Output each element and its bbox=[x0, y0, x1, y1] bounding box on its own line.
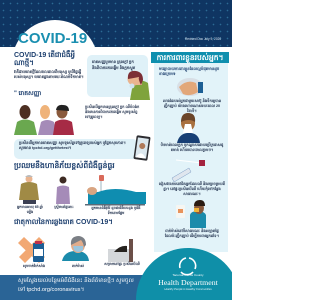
illustration: elderly man bbox=[19, 175, 39, 204]
heading: what is COVID-19: COVID-19 តើជាជំងឺអ្វី bbox=[14, 52, 75, 59]
callout: symptoms bbox=[87, 55, 148, 97]
label: chronic illness: អ្នកមានជំងឺរ៉ាំរ៉ៃ ដូចជាជំងឺបេះដូង ឬជំងឺទឹកនោមផ្អែម bbox=[91, 206, 141, 215]
intro text: វាគឺជាមេរោគថ្មីដែលរាលដាលពីមនុស្ស ឬបើផ្ទៃធ្វើរបស់មនុស្ស។ មេរោគឆ្លងតាមរយៈតំណក់ទឹកមាត់។ bbox=[14, 70, 84, 79]
paragraph: symptom details: ប្រសិនបើអ្នកមានគ្រុនក្តៅ ក្អក ឈឺបំពង់ក និងមានការពិបាកដកដង្ហើម សូមទូរស័ព្ទទៅគ្រូពេទ្យ។ bbox=[85, 105, 139, 119]
prevention step: masks: ពាក់ម៉ាស់នៅទីសាធារណៈ និងសម្អាតផ្ទៃដែលប៉ះញឹកញាប់ ដើម្បីការពារអ្នកដទៃ។ bbox=[165, 229, 219, 238]
illustration: coughing woman bbox=[128, 71, 150, 100]
illustration: staying home with mask bbox=[176, 200, 206, 228]
logo circle bbox=[136, 248, 232, 300]
illustration: woman in purple bbox=[56, 176, 70, 204]
footer band bbox=[0, 275, 232, 300]
illustration: patient in bed bbox=[108, 239, 133, 262]
illustration: masked man bbox=[62, 236, 89, 261]
logo text: Health Department: Health Department bbox=[158, 278, 218, 287]
logo mark bbox=[180, 258, 196, 275]
footer text: សូមស្វែងយល់បន្ថែមអំពីជំងឺនេះ និងព័ត៌មានថ្មីៗ សូមចូលទៅ tpchd.org/coronavirus។ bbox=[18, 278, 134, 293]
logo text: agency name: Tacoma–Pierce County bbox=[172, 273, 204, 277]
label: elderly: អ្នកមានអាយុ 65 ឆ្នាំឡើង bbox=[17, 205, 43, 214]
illustration: tablet doctor bbox=[133, 135, 151, 161]
title: COVID-19 bbox=[18, 30, 87, 47]
heading: what is COVID-19: ណាថ្មី។ bbox=[14, 60, 34, 67]
heading: high risk people: ប្រឈមនឹងហានិភ័យខ្ពស់ពីជំងឺធ្ងន់ធ្ងរ bbox=[14, 161, 115, 170]
callout text: ប្រសិនបើអ្នកមានរោគសញ្ញា សូមទូរស័ព្ទទៅគ្រូពេទ្យរបស់អ្នក ឬផ្នែកសុខភាព។ សូមអាន tpchd.org/getthetest។ bbox=[19, 141, 126, 150]
prevention step: cover cough: បិទមាត់ពេលក្អក ឬកណ្តាស់ដោយប្រើក្រដាសជូតមាត់ ហើយបោះចោលភ្លាមៗ។ bbox=[161, 143, 223, 152]
illustration: person sneezing bbox=[177, 113, 200, 143]
revision date: Revised Doc July 9, 2020 bbox=[185, 37, 221, 41]
label: rest: សម្រាកនៅផ្ទះ ប្រសិនបើឈឺ bbox=[104, 262, 140, 266]
illustration: test swab bbox=[172, 160, 205, 182]
heading: prevention: ការការពារខ្លួនរបស់អ្នក។ bbox=[157, 53, 223, 62]
header banner bbox=[0, 0, 232, 47]
label: pregnant: ស្ត្រីមានផ្ទៃពោះ bbox=[54, 205, 74, 209]
illustration: bandage and vaccine bbox=[18, 237, 45, 263]
illustration: three people with symptoms bbox=[14, 105, 74, 135]
heading: if you have COVID-19: ជាតុកាលនៃការឆ្លងរោគ COVID-19។ bbox=[14, 219, 113, 226]
label: vaccine: សូមចាក់វ៉ាក់សាំង bbox=[23, 264, 45, 268]
illustration: hospital bed bbox=[85, 175, 146, 206]
logo text: tagline: Healthy People in Healthy Communities bbox=[164, 288, 212, 291]
prevention panel bbox=[154, 62, 228, 252]
prevention step: wash hands: លាងដៃរបស់អ្នកជាមួយសាប៊ូ និងទឹកឲ្យបានញឹកញាប់ យ៉ាងហោចណាស់រយៈពេល 20 វិនាទី។ bbox=[163, 99, 221, 113]
label: mask: ពាក់ម៉ាស់ bbox=[72, 264, 84, 268]
title circle bbox=[15, 20, 95, 47]
callout text: រោគសញ្ញារួមមាន គ្រុនក្តៅ ក្អក និងពិបាកដកដង្ហើម និងក្អកស្ងួត bbox=[92, 60, 135, 70]
heading: what is COVID-19 bbox=[14, 50, 75, 67]
illustrations layer bbox=[14, 70, 206, 263]
callout: call your doctor bbox=[14, 139, 138, 159]
footer logo bbox=[136, 248, 232, 300]
illustration: washing hands bbox=[177, 78, 203, 96]
prevention intro: មធ្យោបាយការពារខ្លួនដែលល្អបំផុតមានដូចខាងក្រោម៖ bbox=[159, 66, 219, 76]
symptoms label: " រោគសញ្ញា bbox=[14, 91, 41, 97]
prevention step: stay home: ជៀសវាងការនៅជិតអ្នកដែលឈឺ និងរក្សាចម្ងាយពីគ្នា។ នៅផ្ទះប្រសិនបើឈឺ ហើយកុំទៅកន្លែងសាធារណៈ។ bbox=[159, 182, 225, 196]
